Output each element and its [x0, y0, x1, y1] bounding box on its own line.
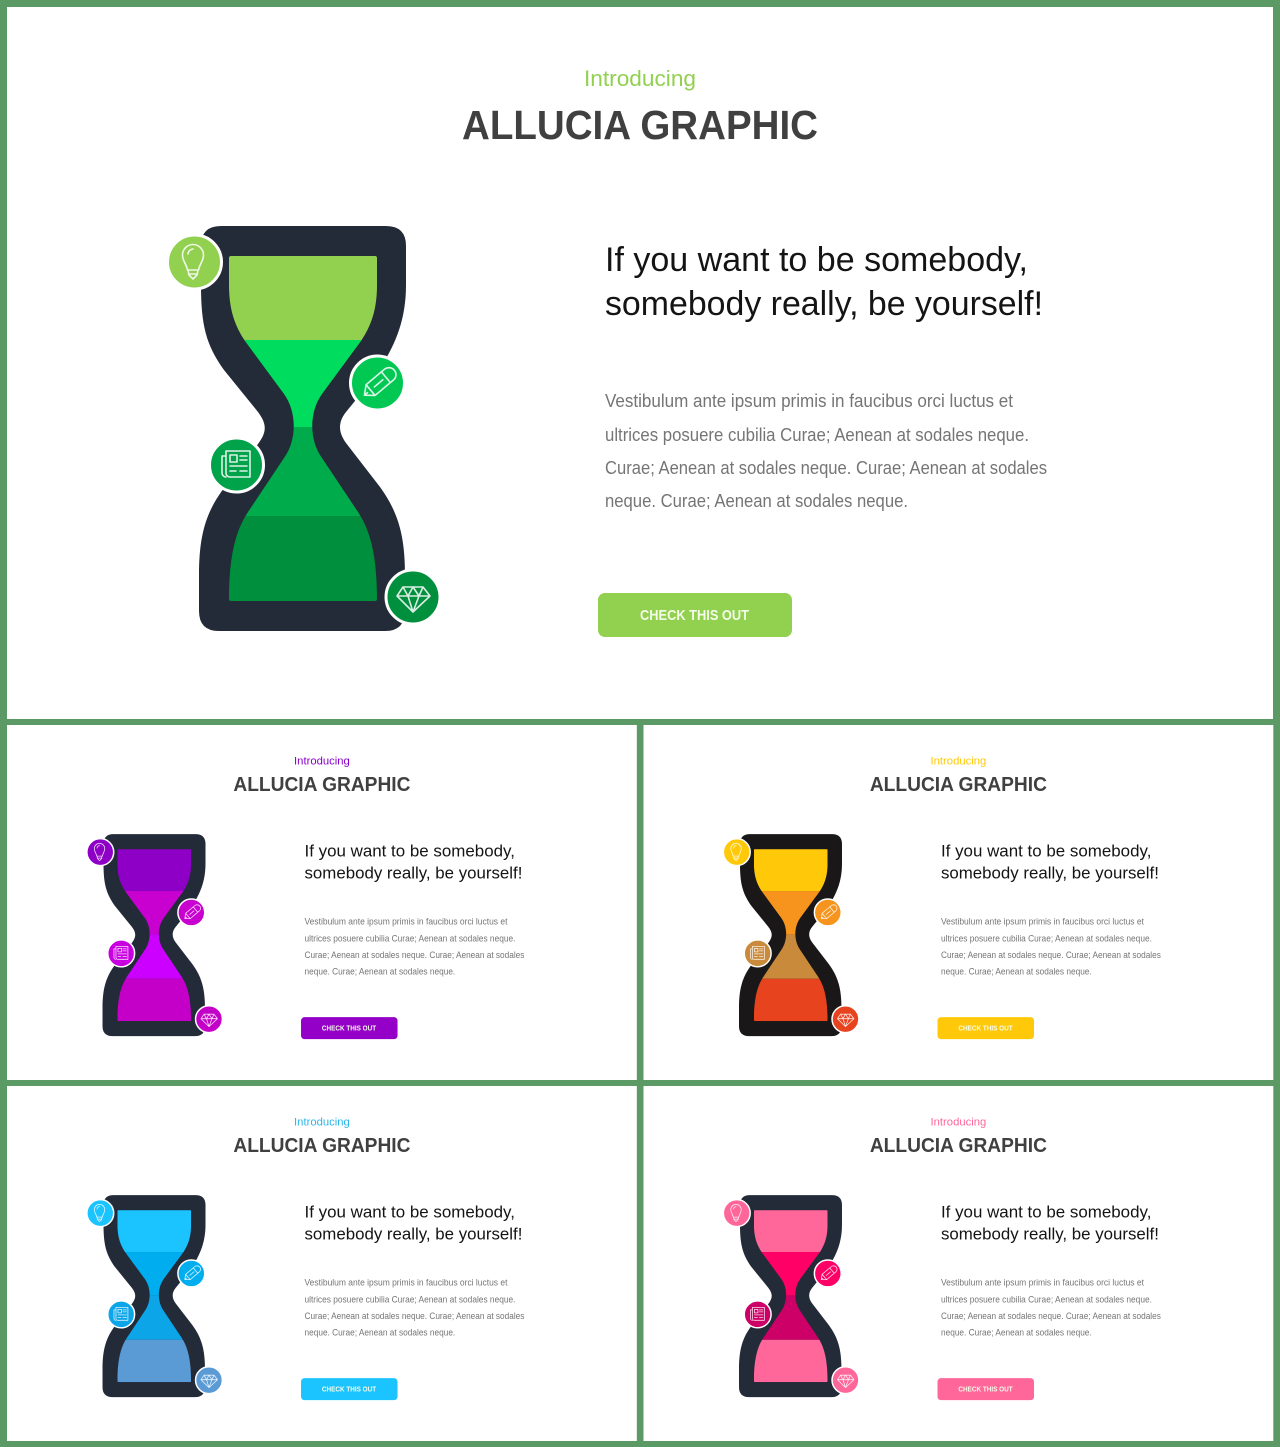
body text: ultrices posuere cubilia Curae; Aenean at sodales neque.	[605, 425, 1029, 445]
body text	[305, 916, 525, 976]
button	[938, 1017, 1034, 1039]
title: ALLUCIA GRAPHIC	[462, 102, 818, 148]
body text	[941, 916, 1161, 976]
body text	[305, 1277, 525, 1337]
quote	[305, 1203, 522, 1244]
eyebrow: Introducing: Introducing	[584, 66, 696, 91]
eyebrow: Introducing: Introducing	[931, 755, 986, 767]
body text: Vestibulum ante ipsum primis in faucibus orci luctus et	[941, 1277, 1144, 1287]
title: ALLUCIA GRAPHIC	[870, 1135, 1047, 1157]
body text: neque. Curae; Aenean at sodales neque.	[305, 966, 455, 976]
quote: somebody really, be yourself!	[305, 1225, 522, 1244]
icon: diamond	[196, 1006, 222, 1033]
icon: light bulb	[168, 235, 222, 289]
hourglass graphic	[87, 834, 222, 1036]
hourglass graphic	[723, 834, 859, 1036]
eyebrow: Introducing: Introducing	[931, 1116, 986, 1128]
body text: Curae; Aenean at sodales neque. Curae; Aenean at sodales	[305, 950, 525, 960]
icon: diamond	[832, 1006, 859, 1033]
body text: ultrices posuere cubilia Curae; Aenean at sodales neque.	[941, 1294, 1152, 1304]
quote: If you want to be somebody,	[941, 842, 1151, 861]
icon: pencil	[178, 1260, 205, 1287]
body text: Vestibulum ante ipsum primis in faucibus orci luctus et	[941, 916, 1144, 926]
quote: somebody really, be yourself!	[605, 285, 1043, 323]
quote	[605, 241, 1043, 323]
body text: Curae; Aenean at sodales neque. Curae; Aenean at sodales	[941, 1311, 1161, 1321]
button	[301, 1378, 398, 1400]
button	[301, 1017, 398, 1039]
body text	[941, 1277, 1161, 1337]
icon: pencil	[814, 1260, 841, 1287]
button: CHECK THIS OUT	[958, 1385, 1013, 1394]
body text: ultrices posuere cubilia Curae; Aenean at sodales neque.	[305, 933, 515, 943]
icon: newspaper	[108, 940, 135, 967]
title: ALLUCIA GRAPHIC	[870, 774, 1047, 796]
icon: diamond	[832, 1367, 859, 1394]
button	[598, 593, 792, 637]
hourglass graphic	[168, 226, 440, 631]
icon: newspaper	[210, 438, 264, 492]
body text: Curae; Aenean at sodales neque. Curae; Aenean at sodales	[305, 1311, 525, 1321]
body text: ultrices posuere cubilia Curae; Aenean at sodales neque.	[305, 1294, 515, 1304]
icon: newspaper	[744, 940, 771, 967]
icon: newspaper	[108, 1301, 135, 1328]
title: ALLUCIA GRAPHIC	[233, 1135, 411, 1157]
icon: newspaper	[744, 1301, 771, 1328]
panel: blue slide	[7, 1086, 637, 1441]
quote	[941, 1203, 1159, 1244]
icon: light bulb	[87, 839, 114, 866]
panel: purple slide	[7, 725, 637, 1080]
quote: somebody really, be yourself!	[941, 1225, 1159, 1244]
body text: Vestibulum ante ipsum primis in faucibus orci luctus et	[305, 916, 508, 926]
quote	[305, 842, 522, 883]
body text: Curae; Aenean at sodales neque. Curae; Aenean at sodales	[941, 950, 1161, 960]
button	[938, 1378, 1034, 1400]
body text	[605, 391, 1047, 511]
button: CHECK THIS OUT	[958, 1024, 1013, 1033]
button: CHECK THIS OUT	[640, 607, 749, 624]
icon: diamond	[196, 1367, 222, 1394]
quote: If you want to be somebody,	[305, 1203, 515, 1222]
body text: neque. Curae; Aenean at sodales neque.	[941, 966, 1092, 976]
body text: neque. Curae; Aenean at sodales neque.	[305, 1327, 455, 1337]
quote: somebody really, be yourself!	[941, 864, 1159, 883]
body text: neque. Curae; Aenean at sodales neque.	[605, 491, 908, 511]
quote	[941, 842, 1159, 883]
hourglass graphic	[87, 1195, 222, 1397]
button: CHECK THIS OUT	[322, 1024, 377, 1033]
hourglass graphic	[723, 1195, 859, 1397]
panel: pink slide	[643, 1086, 1273, 1441]
icon: light bulb	[723, 839, 750, 866]
body text: Curae; Aenean at sodales neque. Curae; Aenean at sodales	[605, 458, 1047, 478]
eyebrow: Introducing: Introducing	[294, 755, 350, 767]
button: CHECK THIS OUT	[322, 1385, 377, 1394]
body text: Vestibulum ante ipsum primis in faucibus orci luctus et	[605, 391, 1013, 411]
quote: somebody really, be yourself!	[305, 864, 522, 883]
quote: If you want to be somebody,	[605, 241, 1028, 279]
eyebrow: Introducing: Introducing	[294, 1116, 350, 1128]
quote: If you want to be somebody,	[941, 1203, 1151, 1222]
icon: diamond	[386, 570, 440, 624]
quote: If you want to be somebody,	[305, 842, 515, 861]
icon: light bulb	[87, 1200, 114, 1227]
icon: pencil	[178, 899, 205, 926]
icon: pencil	[814, 899, 841, 926]
body text: ultrices posuere cubilia Curae; Aenean at sodales neque.	[941, 933, 1152, 943]
body text: neque. Curae; Aenean at sodales neque.	[941, 1327, 1092, 1337]
icon: light bulb	[723, 1200, 750, 1227]
title: ALLUCIA GRAPHIC	[233, 774, 411, 796]
panel: orange slide	[643, 725, 1273, 1080]
panel: green main slide	[7, 7, 1273, 719]
icon: pencil	[350, 356, 404, 410]
body text: Vestibulum ante ipsum primis in faucibus orci luctus et	[305, 1277, 508, 1287]
